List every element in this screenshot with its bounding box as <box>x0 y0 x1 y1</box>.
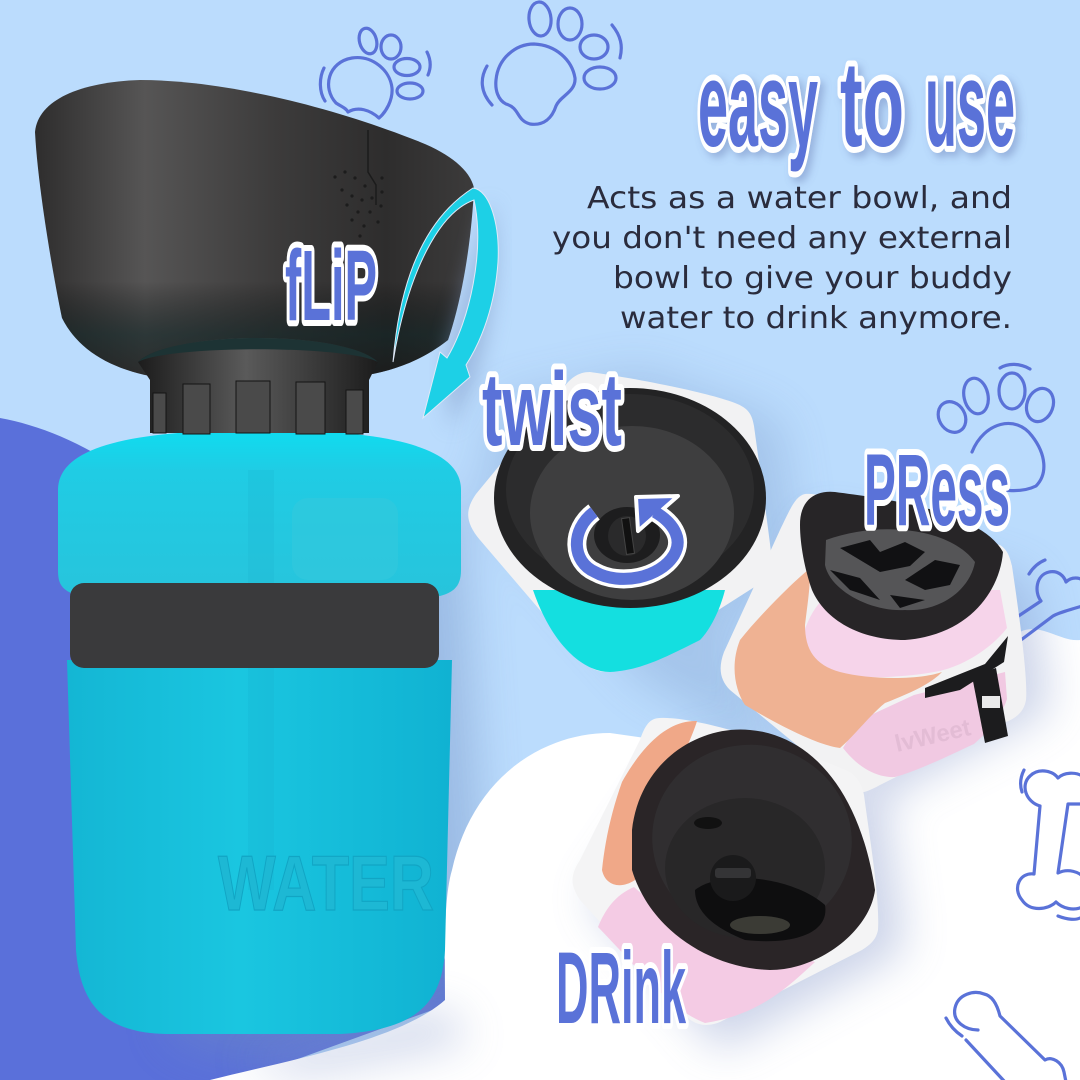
press bowl <box>800 492 1003 640</box>
decorative paw top centre <box>320 26 430 118</box>
decorative bone bottom right <box>946 993 1066 1080</box>
hand <box>735 570 942 748</box>
decorative paw top <box>482 1 621 124</box>
drink tile background <box>572 718 878 1025</box>
arm skin <box>602 721 697 885</box>
teal bottle base <box>533 590 725 672</box>
decorative bone right <box>1018 770 1080 919</box>
body text block: bowl to give your buddy <box>613 261 1012 296</box>
tile shadows on white <box>240 520 1050 1075</box>
body text block: Acts as a water bowl, and <box>587 181 1012 216</box>
bottle neck <box>138 338 378 434</box>
drink bowl <box>632 726 875 970</box>
heading: easy to use: to <box>840 36 904 172</box>
bottle window <box>292 498 398 580</box>
embossed word WATER: WATER <box>218 839 434 927</box>
tile: drink step <box>572 718 878 1025</box>
tile: twist step <box>468 372 772 672</box>
white background blob <box>210 629 1080 1080</box>
bowl cap <box>35 80 474 376</box>
water surface <box>825 529 975 610</box>
pink bottle body <box>598 887 815 1023</box>
product: blue water bottle <box>35 80 474 1034</box>
decorative paw right <box>933 364 1058 491</box>
embossed logo: lvWeet <box>892 714 973 758</box>
bowl floor <box>530 426 734 600</box>
dark strap band <box>70 583 439 668</box>
twist tile background <box>468 372 772 672</box>
pink bottle body <box>804 590 1007 777</box>
water pool and valve <box>694 817 825 941</box>
strap and buckle <box>925 636 1008 743</box>
text: DRink <box>556 931 686 1045</box>
body text block <box>552 181 1012 336</box>
body text block: you don't need any external <box>552 221 1012 256</box>
bottle lower body <box>67 660 452 1034</box>
heading: easy to use: easy <box>698 36 818 172</box>
decorative bone upper right <box>1017 560 1080 640</box>
flip arrow shadow <box>445 200 496 430</box>
twist knob <box>594 507 660 563</box>
body text block: water to drink anymore. <box>620 301 1012 336</box>
flip arrow <box>393 188 498 418</box>
shadow of bottle and tiles <box>170 370 800 1060</box>
label: twist: twist <box>482 352 622 468</box>
tile: press step <box>721 492 1026 793</box>
rotate arrow icon <box>577 496 678 579</box>
purple background blob <box>0 418 460 1080</box>
black bowl <box>494 388 766 608</box>
translucent straw <box>248 470 274 890</box>
press tile background <box>721 494 1026 793</box>
text: fLiP <box>285 230 377 342</box>
bottle upper body <box>58 430 461 596</box>
